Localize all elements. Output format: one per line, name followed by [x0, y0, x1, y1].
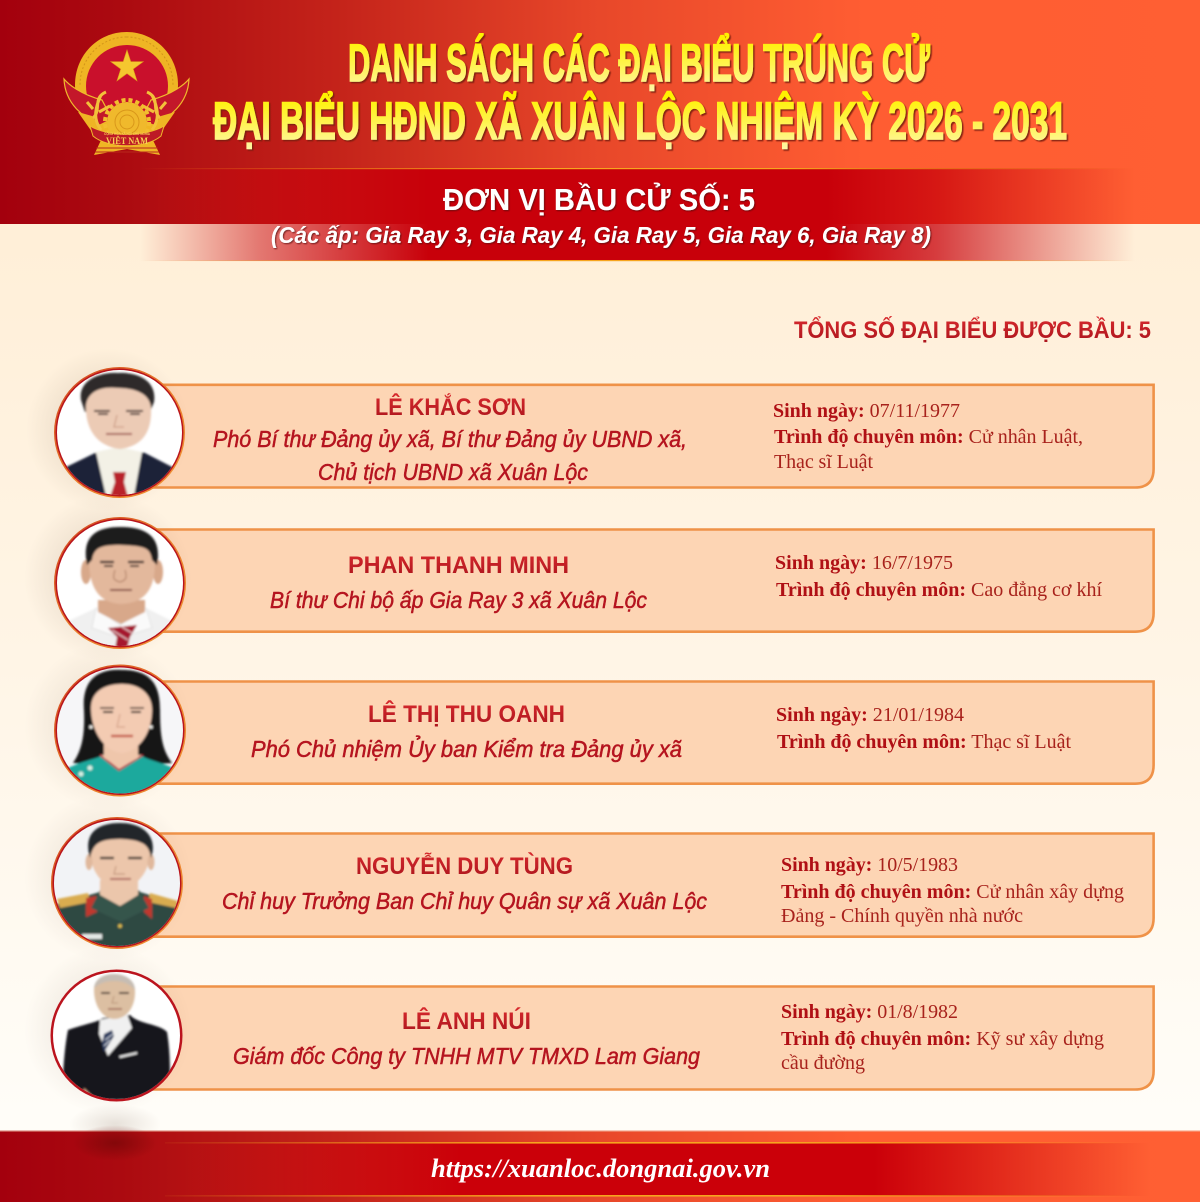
- delegate position: Phó Chủ nhiệm Ủy ban Kiểm tra Đảng ủy xã: [251, 734, 682, 762]
- delegate details: Trình độ chuyên môn: Cử nhân Luật,: [774, 426, 1083, 448]
- delegate name: NGUYỄN DUY TÙNG: [356, 851, 573, 880]
- card background: [140, 385, 1154, 488]
- panel: delegate 4: [24, 794, 1154, 962]
- delegate position: Chỉ huy Trưởng Ban Chỉ huy Quân sự xã Xuân Lộc: [222, 888, 707, 914]
- footer: [0, 1104, 1200, 1202]
- delegate details: Trình độ chuyên môn: Kỹ sư xây dựng: [781, 1028, 1104, 1050]
- portrait: Nguyễn Duy Tùng: [45, 815, 183, 949]
- header banner: [0, 0, 1200, 224]
- delegate details: Đảng - Chính quyền nhà nước: [781, 905, 1023, 927]
- portrait: Lê Khắc Sơn: [44, 366, 185, 498]
- delegate name: LÊ THỊ THU OANH: [368, 700, 565, 728]
- panel: delegate 2: [24, 494, 1154, 662]
- banner: Viet Nam: CỘNG HÒA XÃ HỘI CHỦ NGHĨA: [104, 131, 150, 136]
- delegate details: Sinh ngày: 01/8/1982: [781, 1001, 958, 1023]
- delegate details: Sinh ngày: 21/01/1984: [776, 704, 964, 726]
- website url: https://xuanloc.dongnai.gov.vn: [431, 1154, 770, 1183]
- title: [213, 33, 1067, 151]
- heading: electoral unit: ĐƠN VỊ BẦU CỬ SỐ: 5: [443, 181, 755, 217]
- banner: Viet Nam: [90, 126, 164, 155]
- icon: star: [111, 50, 143, 81]
- delegate details: Trình độ chuyên môn: Cao đẳng cơ khí: [776, 579, 1102, 601]
- delegate details: [776, 704, 1071, 753]
- delegate position: [213, 426, 687, 485]
- delegate position: Bí thư Chi bộ ấp Gia Ray 3 xã Xuân Lộc: [270, 587, 647, 613]
- delegate details: [775, 552, 1102, 601]
- subheading: hamlets: (Các ấp: Gia Ray 3, Gia Ray 4, Gia Ray 5, Gia Ray 6, Gia Ray 8): [271, 222, 931, 248]
- delegate details: Trình độ chuyên môn: Cử nhân xây dựng: [781, 881, 1124, 903]
- delegate position: Chủ tịch UBND xã Xuân Lộc: [318, 459, 588, 485]
- delegate details: Sinh ngày: 16/7/1975: [775, 552, 953, 574]
- portrait: Lê Thị Thu Oanh: [45, 663, 186, 796]
- delegate details: Thạc sĩ Luật: [774, 451, 873, 473]
- delegate name: LÊ ANH NÚI: [402, 1007, 531, 1035]
- delegate position: Phó Bí thư Đảng ủy xã, Bí thư Đảng ủy UBND xã,: [213, 426, 687, 452]
- portrait: Lê Anh Núi: [44, 966, 182, 1102]
- card background: [140, 986, 1154, 1090]
- total delegates: TỔNG SỐ ĐẠI BIỂU ĐƯỢC BẦU: 5: [794, 316, 1151, 344]
- delegate details: Sinh ngày: 10/5/1983: [781, 854, 958, 876]
- delegate details: Sinh ngày: 07/11/1977: [773, 400, 960, 422]
- delegate details: [781, 1001, 1104, 1074]
- card background: [140, 834, 1154, 937]
- delegate details: Trình độ chuyên môn: Thạc sĩ Luật: [777, 731, 1071, 753]
- icon: gear: [105, 100, 149, 144]
- panel: delegate 3: [24, 642, 1154, 810]
- delegate name: LÊ KHẮC SƠN: [375, 393, 526, 421]
- card background: [140, 530, 1154, 632]
- delegate details: [781, 854, 1124, 927]
- delegate name: PHAN THANH MINH: [348, 552, 569, 579]
- banner: Viet Nam: VIỆT NAM: [106, 134, 148, 147]
- delegate position: Giám đốc Công ty TNHH MTV TMXD Lam Giang: [233, 1043, 700, 1069]
- card background: [140, 682, 1154, 784]
- panel: delegate 5: [44, 966, 1155, 1102]
- portrait: Phan Thanh Minh: [41, 512, 186, 649]
- panel: delegate 1: [26, 348, 1154, 512]
- subtitle band: [140, 168, 1135, 261]
- delegate details: cầu đường: [781, 1052, 865, 1074]
- delegate details: [773, 400, 1083, 473]
- icon: national emblem of Vietnam: [64, 32, 189, 155]
